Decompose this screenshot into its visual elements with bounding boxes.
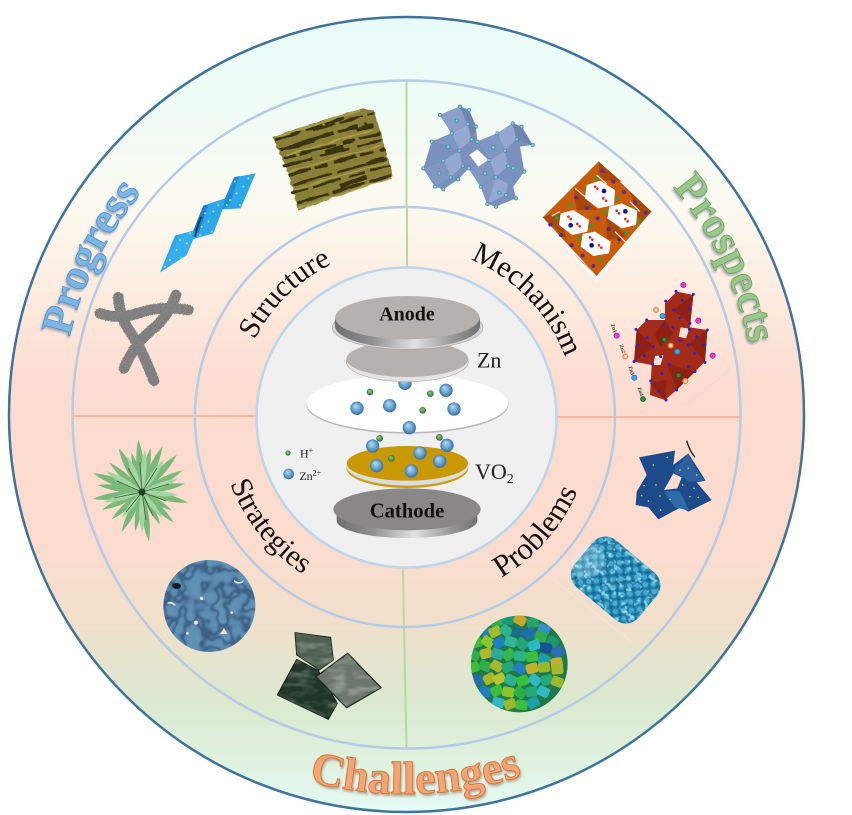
image: red polyhedra crystal with zinc sites: Zn3 (626, 365, 635, 376)
label: Structure: Structure (240, 254, 330, 338)
label: Mechanism: Mechanism (472, 242, 576, 357)
zinc label: Zn (477, 347, 501, 372)
legend: ions: + (309, 446, 314, 455)
image: blue-gray octahedra crystal (422, 105, 534, 208)
legend: ions: 2+ (313, 468, 322, 477)
image: gray entangled fibers (100, 295, 188, 381)
image: blue porous cylinder (553, 530, 667, 643)
hydrogen ions (367, 389, 443, 462)
cathode disc (333, 488, 481, 538)
image: red polyhedra crystal with zinc sites: Zn2 (617, 344, 626, 355)
panel: battery core circle (256, 268, 556, 568)
ring: middle circle (72, 80, 740, 748)
image: red polyhedra crystal with zinc sites: Zn4 (635, 386, 644, 397)
legend: ions (283, 446, 322, 483)
anode disc (332, 296, 483, 349)
image: brown layered stack (273, 108, 393, 211)
image: orange framework crystal (539, 160, 654, 281)
image: blue twisted ribbon (160, 173, 256, 272)
vanadium oxide cathode layer (346, 446, 468, 488)
label: Problems: Problems (491, 487, 576, 578)
electrolyte disc (306, 375, 508, 434)
VO2 label: 2 (507, 472, 514, 487)
image: green faceted nanoparticle sphere (466, 613, 568, 712)
image: red polyhedra crystal with zinc sites: Zn1 (609, 323, 618, 334)
legend: ions: Zn (299, 469, 313, 483)
heading: Prospects: Prospects (671, 170, 768, 346)
VO2 label: VO (475, 459, 507, 484)
battery diagram (283, 296, 514, 538)
label: Strategies: Strategies (232, 479, 310, 572)
legend: ions: H (300, 447, 309, 461)
zinc ions (350, 384, 461, 478)
image: dark green-gray sheets (277, 633, 381, 719)
image: red polyhedra crystal with zinc sites (609, 282, 730, 407)
cathode label: Cathode (370, 500, 444, 522)
heading: Progress: Progress (40, 182, 139, 339)
image: green spiky flower (92, 439, 189, 542)
ring: inner circle (195, 207, 615, 627)
image: dark blue puckered sheet (636, 441, 712, 519)
anode label: Anode (379, 304, 435, 326)
ion behind zinc (398, 377, 412, 390)
image: porous blue disc (163, 560, 255, 652)
heading: Challenges: Challenges (312, 754, 522, 802)
zinc disc (346, 341, 468, 382)
